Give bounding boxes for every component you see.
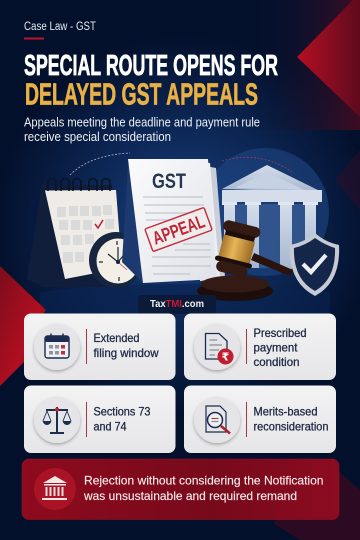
card: sections 73 and 74: Sections 73 <box>94 405 151 419</box>
card: merits-based reconsideration: Merits-based <box>254 405 318 419</box>
decoration: bottom left red triangle <box>0 266 46 386</box>
card: merits-based reconsideration <box>184 386 336 453</box>
icon: courthouse <box>222 165 322 269</box>
dashed arc <box>70 153 292 175</box>
icon: institution <box>34 468 76 510</box>
title <box>24 50 278 112</box>
icon: scales <box>42 407 72 433</box>
brand label: TaxTMI.com <box>150 299 204 310</box>
card: merits-based reconsideration: reconsideration <box>254 420 328 434</box>
decoration: top right red diamond <box>297 0 360 117</box>
callout: conclusion banner: Rejection without considering the Notification <box>84 474 324 488</box>
subtitle <box>24 116 260 144</box>
icon: desk calendar <box>27 178 122 287</box>
card: prescribed payment condition <box>184 314 336 380</box>
callout: conclusion banner <box>22 459 339 520</box>
card: prescribed payment condition: condition <box>254 355 300 369</box>
callout: conclusion banner: was unsustainable and required remand <box>83 489 297 503</box>
icon: gavel <box>197 219 293 301</box>
card: extended filing window: Extended <box>94 331 140 345</box>
icon: calendar <box>45 334 69 358</box>
card: prescribed payment condition: Prescribed <box>254 326 306 340</box>
icon: document with rupee: ₹ <box>222 350 230 364</box>
subtitle: receive special consideration <box>24 130 171 144</box>
handle <box>251 253 293 276</box>
icon: GST document stack <box>122 159 225 283</box>
stamp: APPEAL: APPEAL <box>150 210 207 249</box>
accent rule <box>24 38 44 40</box>
backdrop glow <box>201 148 329 276</box>
card: extended filing window: filing window <box>94 346 159 360</box>
card: sections 73 and 74 <box>24 386 176 453</box>
card: extended filing window <box>24 314 176 380</box>
card: sections 73 and 74: and 74 <box>94 420 127 434</box>
brand label <box>138 295 216 314</box>
icon: document with magnifier <box>206 406 230 434</box>
icon: document with rupee <box>206 334 234 364</box>
card: prescribed payment condition: payment <box>254 340 298 354</box>
icon: shield with check <box>290 233 339 296</box>
icon: clock <box>89 232 143 288</box>
illustration: legal hero scene <box>27 148 339 301</box>
subtitle: Appeals meeting the deadline and payment rule <box>24 116 260 130</box>
icon: GST document stack: GST <box>152 170 186 193</box>
eyebrow label: Case Law - GST <box>24 21 96 33</box>
